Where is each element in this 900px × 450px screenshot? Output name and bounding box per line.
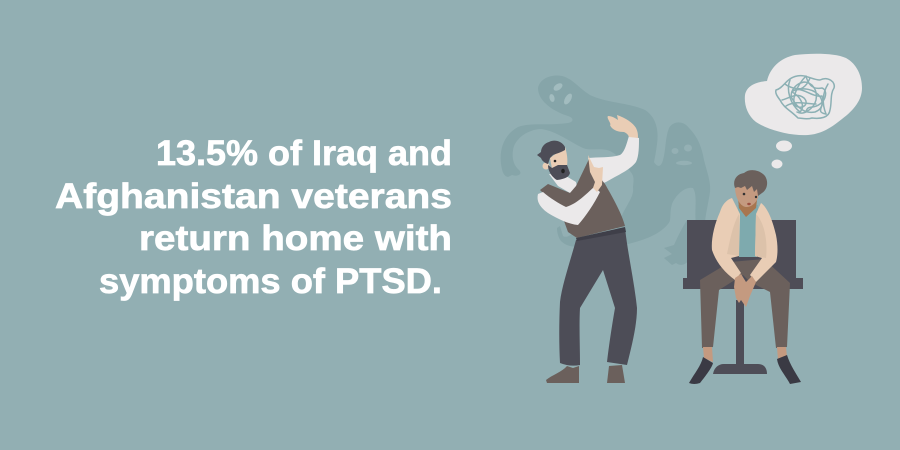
shirt — [738, 205, 758, 257]
ankles — [703, 347, 787, 362]
headline text: symptoms of PTSD. — [99, 262, 442, 301]
trousers — [700, 259, 790, 348]
tangled scribble — [776, 76, 834, 119]
ghost hand low left — [557, 226, 582, 247]
right shoe — [607, 365, 625, 383]
ear — [542, 162, 550, 170]
left shoe — [689, 357, 713, 384]
hands — [734, 274, 756, 307]
eye and mouth — [554, 160, 565, 173]
face — [735, 184, 758, 207]
raised hand — [608, 115, 638, 138]
face — [550, 147, 567, 169]
headline text: 13.5% of Iraq and — [156, 134, 452, 173]
raised arm sleeve — [588, 136, 639, 186]
headline text — [55, 134, 452, 301]
ghost eyes — [549, 82, 574, 106]
beard — [548, 165, 570, 180]
thought dot small — [772, 160, 782, 168]
front hand — [588, 155, 603, 192]
belt — [576, 227, 626, 241]
hair — [537, 141, 565, 164]
headline text: return home with — [139, 219, 452, 258]
chair base — [713, 364, 767, 374]
hair — [734, 170, 767, 196]
neck — [738, 198, 757, 217]
jacket right — [750, 203, 778, 282]
eyes and mouth — [743, 193, 757, 205]
crossing arm sleeve — [538, 187, 600, 225]
trousers — [559, 228, 637, 366]
ghosts behind the man — [501, 76, 710, 265]
headline text: Afghanistan veterans — [55, 177, 452, 216]
bubble cloud — [745, 54, 862, 135]
chair seat — [683, 278, 803, 289]
thought dot large — [776, 140, 792, 152]
left shoe — [546, 366, 579, 383]
collar — [549, 174, 577, 193]
man defending himself — [537, 115, 639, 383]
ghost face — [672, 144, 692, 165]
seated person — [689, 170, 801, 384]
right shoe — [777, 355, 801, 384]
chair pole — [736, 300, 744, 366]
thought bubble — [745, 54, 862, 168]
vest — [540, 159, 625, 238]
chair back — [687, 220, 796, 280]
jacket left — [712, 198, 741, 280]
chair — [683, 220, 803, 374]
jacket shading — [727, 214, 767, 258]
ghost bodies — [501, 76, 710, 246]
ghost arm right — [664, 220, 690, 265]
